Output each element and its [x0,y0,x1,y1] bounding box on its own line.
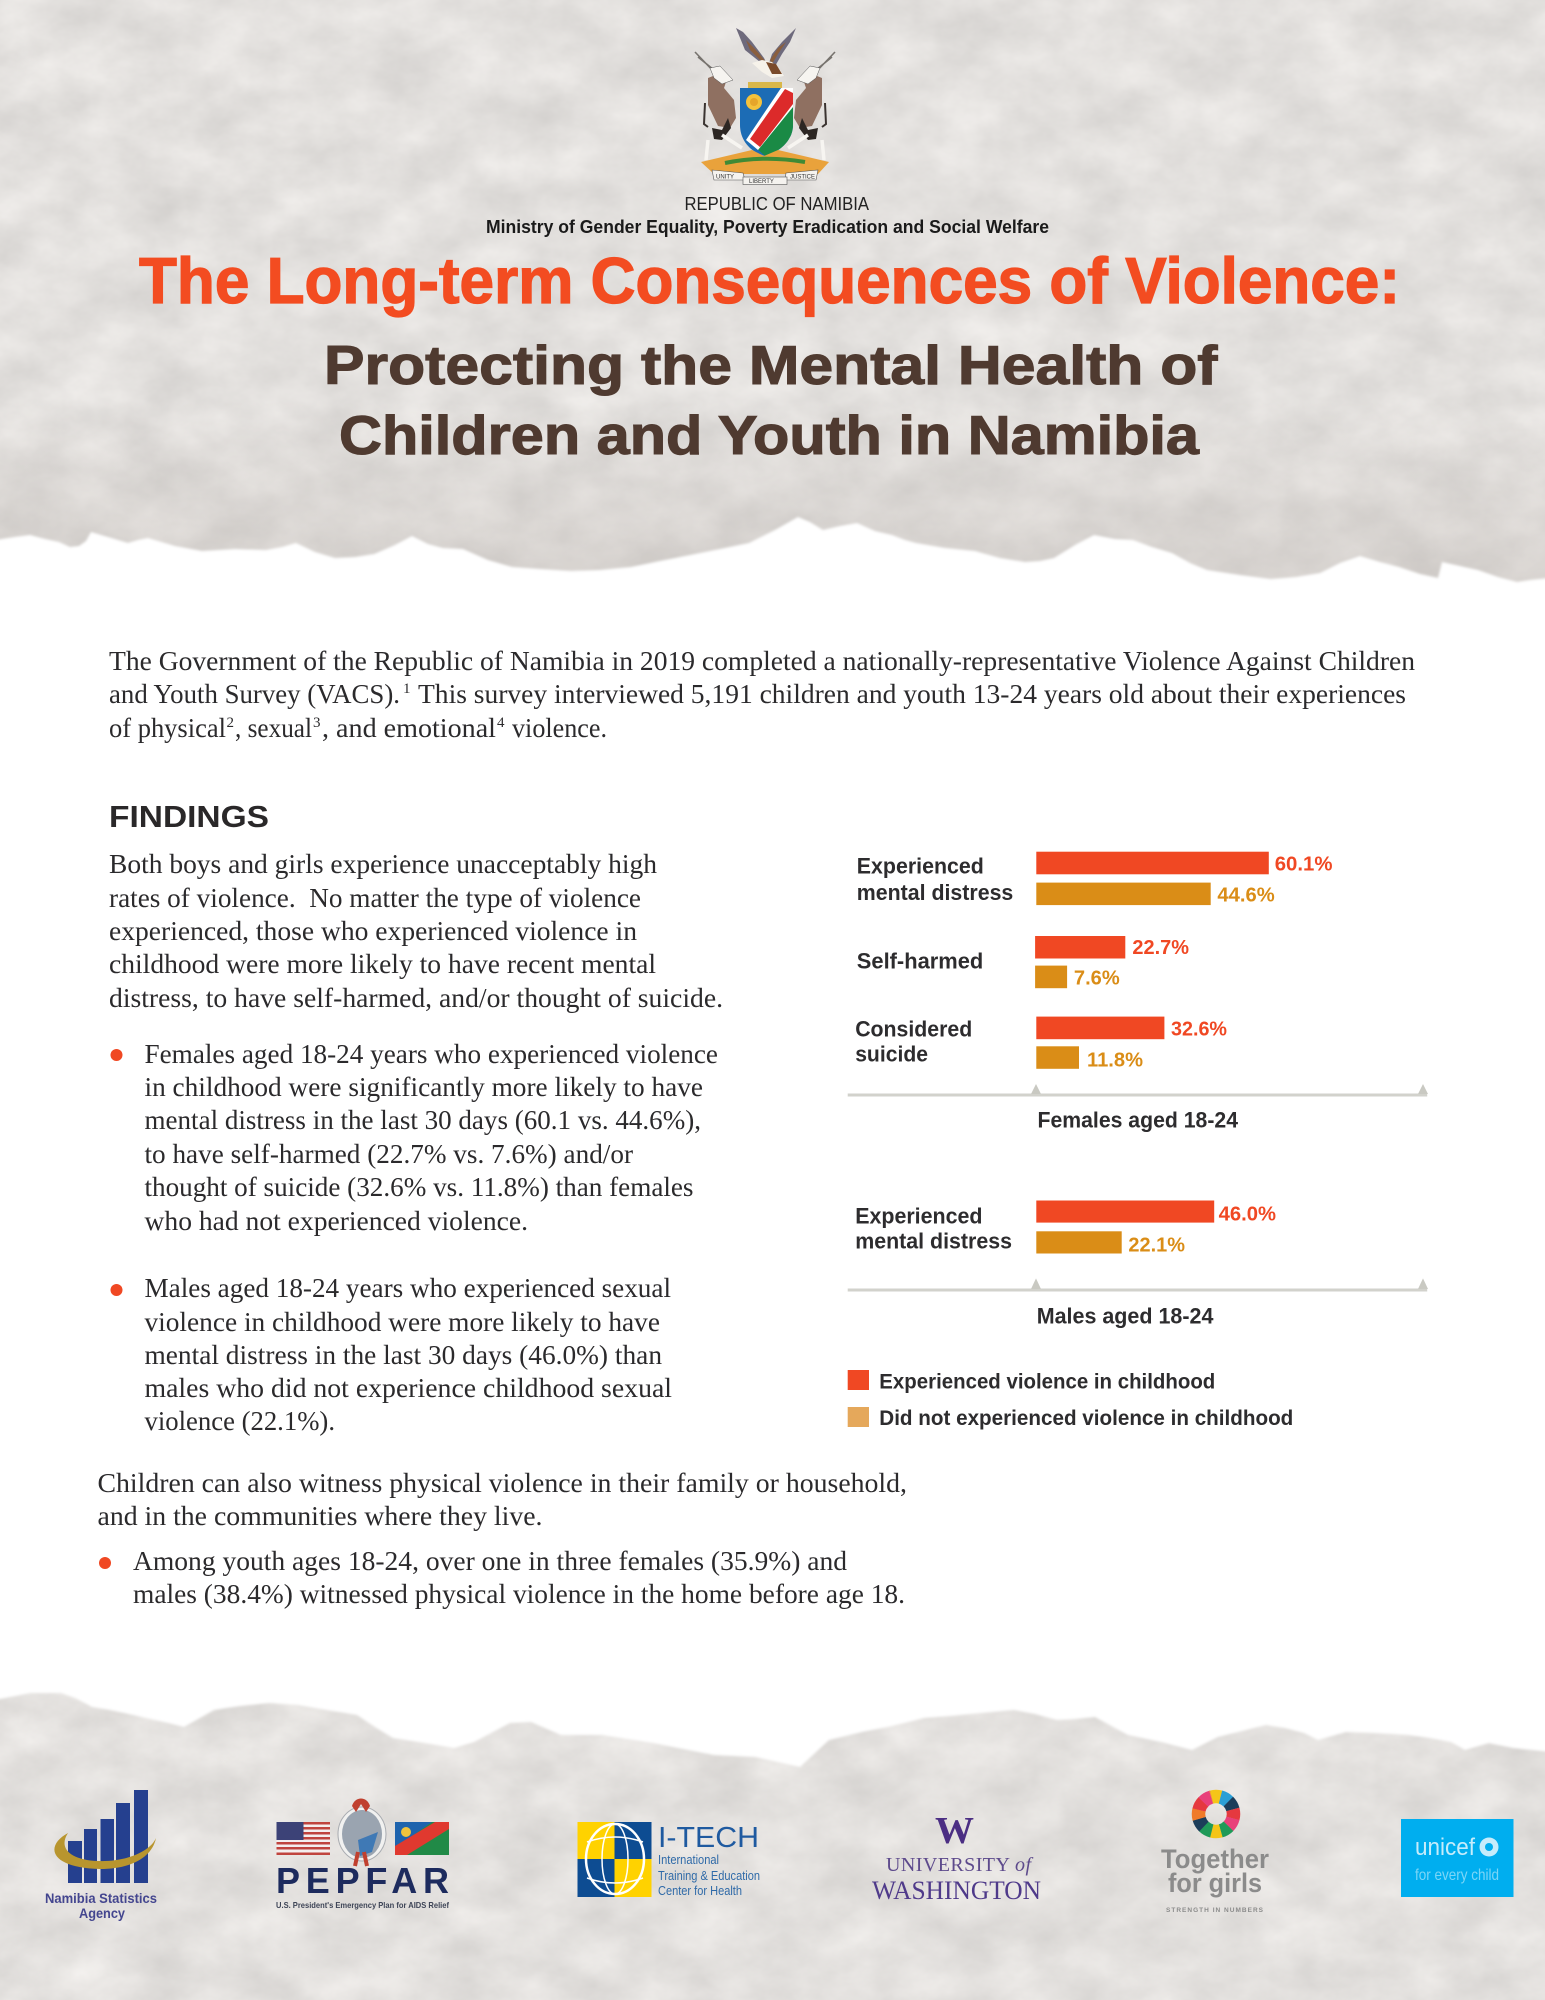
bullet: females finding: thought of suicide (32.6% vs. 11.8%) than females [144,1172,694,1202]
findings paragraph: childhood were more likely to have recent mental [109,949,656,979]
females axis title: Females aged 18-24 [1038,1108,1239,1133]
row: experienced mental distress: mental distress [857,880,1013,905]
logo: UNICEF [1401,1819,1514,1897]
row: experienced mental distress [855,1200,1276,1256]
logo: Together for Girls [1161,1793,1269,1914]
subtitle [324,334,1218,466]
findings paragraph: Both boys and girls experience unacceptably high [109,849,658,879]
intro paragraph: 4 [497,715,505,731]
intro paragraph: and Youth Survey (VACS). [109,679,400,709]
eagle [736,28,796,89]
Namibia flag [395,1822,449,1855]
ground and motto ribbons: LIBERTY [749,179,774,185]
legend: Did not experienced violence in childhood [879,1407,1293,1430]
logo: Namibia Statistics Agency: Namibia Statistics [45,1890,157,1906]
bullet: males finding [110,1273,672,1436]
intro paragraph: 3 [313,715,320,731]
intro paragraph: violence. [512,713,607,743]
intro paragraph [109,646,1416,743]
findings heading: FINDINGS [109,799,269,834]
row: experienced mental distress: 44.6% [1217,884,1275,907]
logo: University of Washington: UNIVERSITY of [886,1854,1033,1876]
bullet: females finding: in childhood were significantly more likely to have [144,1072,703,1102]
logo: University of Washington [872,1810,1041,1905]
logo: UNICEF: unicef [1415,1834,1475,1861]
witnessing violence paragraph: and in the communities where they live. [98,1501,542,1531]
intro paragraph: 1 [403,681,410,697]
logo: Together for Girls: STRENGTH IN NUMBERS [1166,1907,1264,1914]
intro paragraph: This survey interviewed 5,191 children and youth 13-24 years old about their experiences [418,679,1406,709]
bullet: males finding: Males aged 18-24 years who experienced sexual [144,1273,671,1303]
subtitle: Children and Youth in Namibia [339,404,1199,466]
row: experienced mental distress: Experienced [855,1203,982,1228]
bar chart: females aged 18-24 [848,852,1428,1133]
row: considered suicide [855,1016,1227,1072]
bullet: males finding: violence in childhood were more likely to have [144,1307,660,1337]
row: self-harmed: Self-harmed [857,948,983,973]
bullet: females finding: who had not experienced violence. [144,1206,528,1236]
bullet: females finding: Females aged 18-24 years who experienced violence [144,1039,718,1069]
row: self-harmed: 22.7% [1132,936,1189,959]
bullet: females finding [110,1039,718,1236]
row: considered suicide: suicide [855,1041,928,1066]
bullet: males finding: males who did not experience childhood sexual [144,1373,672,1403]
row: experienced mental distress: 60.1% [1275,853,1332,876]
icon: coat of arms of Namibia [695,28,835,185]
row: considered suicide: 11.8% [1087,1048,1143,1072]
shield [740,88,793,156]
row: experienced mental distress [857,852,1332,907]
bullet: males finding: mental distress in the last 30 days (46.0%) than [144,1340,663,1370]
intro paragraph: 2 [226,715,234,731]
logo: Together for Girls: Together [1161,1844,1269,1874]
ground and motto ribbons [701,150,829,185]
legend: Experienced violence in childhood [879,1370,1215,1393]
ground and motto ribbons: UNITY [716,174,734,180]
subtitle: Protecting the Mental Health of [324,334,1218,396]
males axis title: Males aged 18-24 [1037,1304,1214,1328]
row: self-harmed: 7.6% [1074,967,1120,990]
bullet: females finding: to have self-harmed (22.7% vs. 7.6%) and/or [144,1139,633,1169]
males axis [848,1278,1428,1292]
logo: PEPFAR [276,1798,449,1910]
row: self-harmed [857,936,1189,990]
intro paragraph: , sexual [235,713,312,743]
witnessing violence paragraph [98,1468,907,1531]
bullet: males finding: violence (22.1%). [144,1406,335,1436]
witnessing violence paragraph: Children can also witness physical violence in their family or household, [98,1468,907,1498]
females axis [848,1084,1428,1096]
bullet: witnessed violence [99,1546,905,1609]
intro paragraph: of physical [109,713,226,743]
globe and ribbon [338,1798,386,1866]
bullet: females finding: mental distress in the last 30 days (60.1 vs. 44.6%), [144,1105,701,1135]
row: considered suicide: 32.6% [1171,1018,1227,1041]
row: experienced mental distress: Experienced [857,854,984,878]
ground and motto ribbons: JUSTICE [790,174,815,180]
logo: UNICEF: for every child [1415,1867,1499,1884]
logo: I-TECH: Center for Health [658,1883,742,1898]
government heading [486,194,1049,237]
bullet: witnessed violence: males (38.4%) witnessed physical violence in the home before age 18. [133,1579,905,1609]
row: experienced mental distress: mental distress [855,1229,1012,1254]
findings paragraph: rates of violence. No matter the type of violence [109,883,641,913]
bar chart: males aged 18-24 [848,1200,1428,1328]
logo: PEPFAR: U.S. President's Emergency Plan for AIDS Relief [276,1900,449,1910]
title: The Long-term Consequences of Violence: [139,244,1400,317]
logo: I-TECH: I-TECH [658,1822,759,1854]
logo: University of Washington: W [935,1810,974,1852]
logo: I-TECH: Training & Education [658,1868,760,1883]
row: experienced mental distress: 22.1% [1128,1234,1185,1256]
government heading: Ministry of Gender Equality, Poverty Eradication and Social Welfare [486,216,1049,237]
findings paragraph: distress, to have self-harmed, and/or thought of suicide. [109,983,723,1013]
horns and antelope supporters [695,52,835,160]
row: considered suicide: Considered [855,1016,972,1041]
logo: PEPFAR: PEPFAR [276,1860,449,1901]
logo: Namibia Statistics Agency: Agency [79,1905,125,1921]
logo: I-TECH: International [658,1852,719,1867]
logo: University of Washington: WASHINGTON [872,1876,1041,1905]
findings paragraph: experienced, those who experienced violence in [109,916,638,946]
US flag [276,1822,330,1855]
logo: Together for Girls: for girls [1168,1868,1262,1898]
colored ring [1195,1793,1237,1835]
government heading: REPUBLIC OF NAMIBIA [684,194,869,214]
intro paragraph: , and emotional [322,713,496,743]
intro paragraph: The Government of the Republic of Namibia in 2019 completed a nationally-representative Violence Against Children [109,646,1416,676]
logo: Namibia Statistics Agency [45,1790,157,1921]
legend [848,1370,1293,1430]
findings paragraph [109,849,723,1013]
row: experienced mental distress: 46.0% [1219,1202,1276,1225]
logo: I-TECH [578,1822,760,1898]
bullet: witnessed violence: Among youth ages 18-24, over one in three females (35.9%) and [133,1546,847,1576]
